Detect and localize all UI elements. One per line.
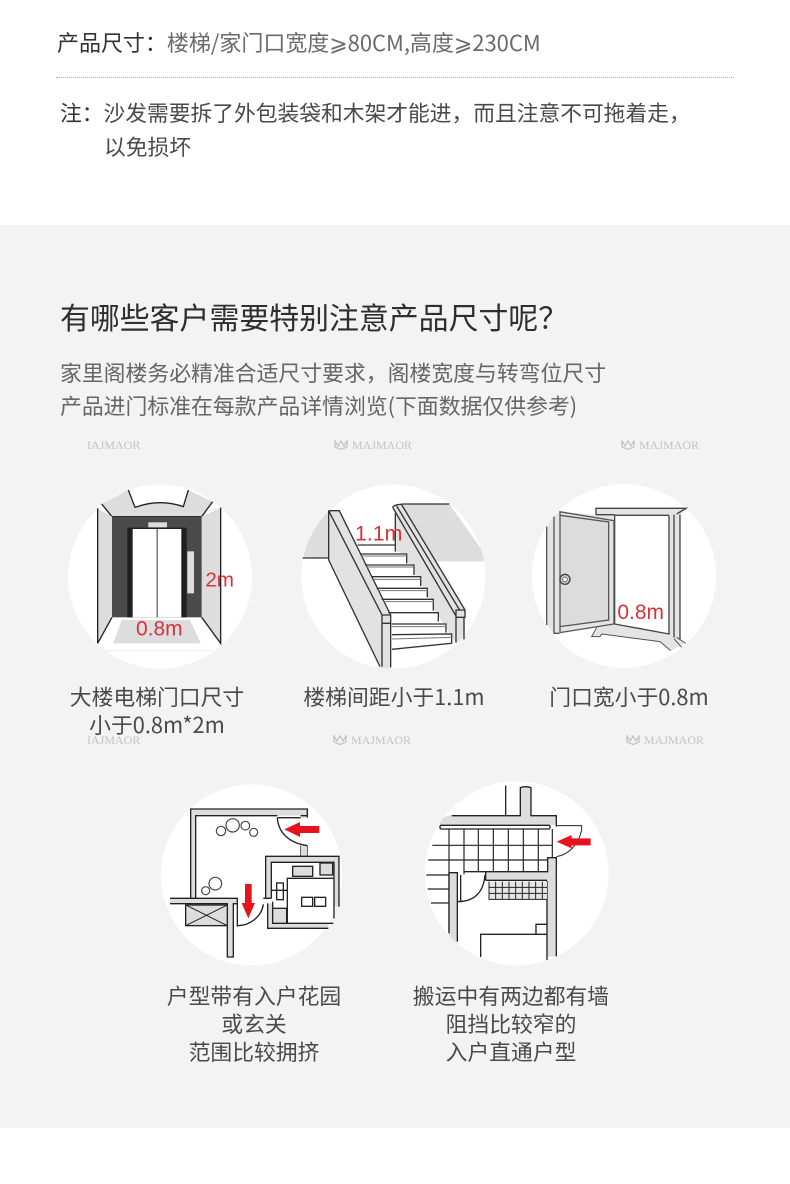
label: 0.8m: 0.8m: [617, 601, 664, 624]
caption: elevator: [70, 681, 244, 740]
heading: 有哪些客户需要特别注意产品尺寸呢？: [60, 294, 568, 338]
caption: garden layout: 户型带有入户花园: [167, 980, 341, 1011]
watermark row 1: MAJMAOR: [352, 438, 412, 452]
room: [266, 856, 339, 907]
icon: staircase: [297, 485, 490, 669]
icon: narrow entry floor plan: [425, 781, 609, 965]
watermark row 2: MAJMAOR: [644, 733, 704, 747]
panel: grey section background: [0, 225, 790, 1128]
note text: 注：沙发需要拆了外包装袋和木架才能进，而且注意不可拖着走，: [60, 97, 691, 128]
arrow: red right door: [284, 822, 319, 837]
watermark row 2: MAJMAOR: [351, 733, 411, 747]
icon: floor plan with garden: [161, 784, 342, 966]
icon: door: [532, 484, 716, 668]
label: 0.8m: 0.8m: [136, 617, 183, 640]
caption: straight entry: 搬运中有两边都有墙: [413, 980, 609, 1011]
caption: stairs: 楼梯间距小于1.1m: [303, 681, 485, 712]
watermark row 1: MAJMAOR: [639, 438, 699, 452]
caption: straight entry: [413, 980, 609, 1067]
body text: 产品进门标准在每款产品详情浏览(下面数据仅供参考): [60, 390, 577, 421]
caption: garden layout: 或玄关: [221, 1008, 287, 1039]
note text: [60, 97, 691, 162]
caption: elevator: 小于0.8m*2m: [89, 709, 225, 740]
note text: 以免损坏: [104, 131, 191, 162]
caption: garden layout: 范围比较拥挤: [189, 1036, 319, 1067]
caption: door: 门口宽小于0.8m: [549, 681, 709, 712]
door arcs: [277, 818, 307, 846]
arrow: red entry: [557, 835, 591, 848]
arrow: red lower door: [242, 884, 255, 918]
product size line: 产品尺寸：楼梯/家门口宽度⩾80CM,高度⩾230CM: [57, 26, 541, 58]
icon: elevator: [68, 485, 252, 669]
watermark row 2: [87, 733, 704, 747]
caption: straight entry: 入户直通户型: [446, 1036, 576, 1067]
watermark row 1: [87, 438, 699, 452]
watermark row 1: IAJMAOR: [87, 438, 140, 452]
label: 1.1m: 1.1m: [355, 522, 402, 546]
caption: garden layout: [167, 980, 341, 1067]
caption: straight entry: 阻挡比较窄的: [446, 1008, 576, 1039]
label: 2m: 2m: [205, 569, 234, 592]
plants: [202, 819, 258, 895]
body text: [60, 357, 606, 421]
watermark row 2: IAJMAOR: [87, 733, 140, 747]
body text: 家里阁楼务必精准合适尺寸要求，阁楼宽度与转弯位尺寸: [60, 357, 606, 388]
caption: elevator: 大楼电梯门口尺寸: [70, 681, 244, 712]
